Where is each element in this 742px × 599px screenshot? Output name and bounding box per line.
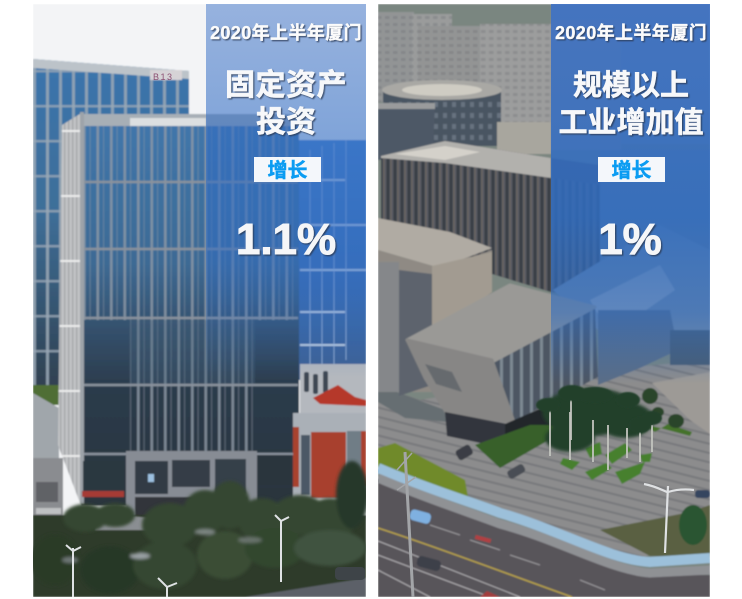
heading: indicator name: 规模以上 (573, 69, 689, 102)
red heritage building (293, 364, 366, 499)
blue overlay (206, 4, 366, 366)
lobby (126, 451, 257, 516)
building far right (298, 140, 366, 380)
value: 1.1% (236, 215, 336, 264)
tag: growth (598, 157, 665, 182)
palm trees (536, 385, 662, 470)
tag: growth: 增长 (268, 159, 308, 182)
tag: growth: 增长 (612, 159, 652, 182)
photo: office towers (33, 4, 366, 597)
value: 1% (598, 215, 662, 264)
greenery (474, 424, 554, 468)
heading: indicator name: 固定资产 (225, 69, 347, 102)
ground and road (33, 515, 366, 597)
heading: indicator name: 工业增加值 (558, 106, 704, 139)
heading: indicator name (225, 69, 347, 139)
main tower facade (81, 114, 299, 506)
sign: B13: B13 (153, 72, 174, 82)
silver landmark building (407, 285, 598, 450)
tag: growth (254, 157, 321, 182)
blue fence (378, 468, 710, 562)
photo: industrial campus (378, 4, 710, 597)
panel: fixed asset investment (31, 4, 368, 597)
street lamps (66, 515, 289, 597)
road markings (378, 528, 572, 597)
road (378, 480, 710, 597)
cars (409, 509, 432, 525)
heading: period: 2020年上半年厦门 (555, 22, 707, 43)
street lamp and poles (397, 452, 694, 597)
right side campus behind (600, 150, 710, 320)
panel: industrial value added (378, 4, 710, 597)
trees (31, 461, 368, 594)
round building (382, 80, 502, 146)
blue overlay (551, 4, 710, 377)
heading: indicator name: 投资 (256, 106, 316, 139)
heading: indicator name (558, 69, 704, 139)
middle long building (381, 141, 600, 295)
parked car (335, 567, 365, 580)
lower left tan building (378, 218, 492, 396)
plaza ground (378, 360, 710, 560)
heading: period: 2020年上半年厦门 (210, 22, 362, 43)
